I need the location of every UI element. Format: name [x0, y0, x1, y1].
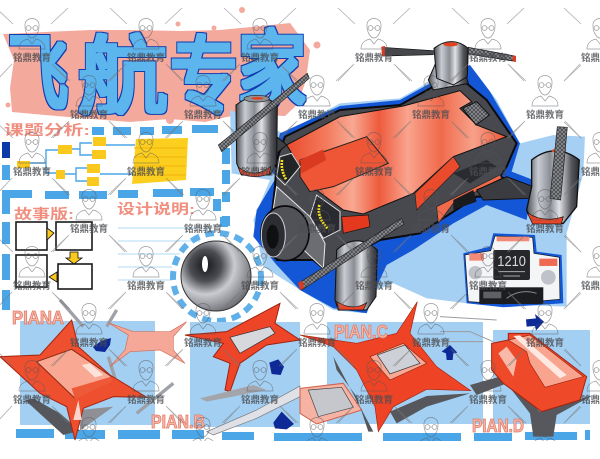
mind map: [2, 137, 188, 186]
remote controller: [463, 233, 563, 307]
watermark layer: 铭鼎教育: [469, 52, 507, 64]
title: 飞航专家: 专: [170, 30, 238, 124]
lens detail circle: [173, 233, 261, 321]
shadow: [25, 398, 80, 435]
watermark layer: 铭鼎教育: [469, 394, 507, 406]
watermark layer: 铭鼎教育: [127, 52, 165, 64]
bottom dashed border: [16, 429, 590, 441]
shadow and stand: [470, 377, 593, 437]
concept C sketch: [300, 302, 544, 432]
top highlight: [508, 335, 583, 387]
watermark layer: 铭鼎教育: [298, 223, 336, 235]
watermark layer: 铭鼎教育: [13, 166, 51, 178]
heading: design description: 设计说明:: [117, 201, 195, 217]
watermark layer: 铭鼎教育: [298, 109, 336, 121]
top panel: [370, 343, 427, 380]
remote blue outline: [463, 233, 563, 307]
watermark layer: 铭鼎教育: [526, 223, 564, 235]
box body: [492, 333, 587, 412]
watermark layer: 铭鼎教育: [526, 337, 564, 349]
side panel: [437, 175, 502, 223]
watermark layer: 铭鼎教育: [70, 109, 108, 121]
heading: storyboard: 故事版:: [14, 206, 74, 222]
red buttons: [497, 237, 529, 241]
map connectors: [30, 143, 135, 181]
screen: [493, 250, 530, 280]
light blue marker shadow: [230, 65, 585, 313]
motor front: [335, 241, 377, 310]
watermark layer: 铭鼎教育: [13, 394, 51, 406]
watermark layer: 铭鼎教育: [355, 52, 393, 64]
title: 飞航专家: 飞: [8, 27, 68, 121]
body: dark shell: [270, 83, 532, 270]
watermark layer: 铭鼎教育: [355, 394, 393, 406]
main drone rendering: [218, 42, 585, 313]
concept backgrounds: pale blue: [20, 321, 590, 427]
top panel: [230, 327, 275, 353]
lower display: [479, 287, 543, 304]
label: PIAN A: PIANA: [12, 308, 64, 328]
panel: topic analysis dashed frame: [2, 125, 230, 310]
watermark layer: 铭鼎教育: [298, 337, 336, 349]
concept A sketch: [0, 300, 173, 440]
star body: [0, 320, 147, 440]
rear arm: [477, 177, 533, 200]
watermark layer: 铭鼎教育: [355, 280, 393, 292]
label: PIAN B: PIAN.B: [151, 412, 205, 432]
label: PIAN D: PIAN.D: [472, 416, 524, 436]
body: red top shell: [287, 91, 507, 214]
design description lines: [118, 228, 215, 280]
watermark layer: 铭鼎教育: [184, 223, 222, 235]
propellers: [60, 300, 173, 413]
watermark layer: 铭鼎教育: [526, 109, 564, 121]
top panel: [37, 349, 112, 398]
title: 飞航专家: 航: [78, 30, 168, 124]
arrows: [269, 359, 284, 375]
headlight right with yellow LEDs: [310, 195, 340, 238]
watermark layer: 铭鼎教育: [241, 280, 279, 292]
arrow: concept A to flat plan: [93, 338, 111, 352]
camera lens: [261, 206, 309, 261]
title: 飞航专家: [8, 24, 306, 124]
watermark layer: 铭鼎教育: [469, 166, 507, 178]
watermark layer: 铭鼎教育: [184, 337, 222, 349]
storyboard frames: [16, 222, 92, 289]
dark blue marker shadow: [253, 65, 533, 313]
arrows: [47, 228, 54, 240]
left arm: [262, 137, 287, 153]
front red plate: [342, 215, 370, 233]
propeller front: [298, 218, 404, 290]
watermark layer: 铭鼎教育: [70, 337, 108, 349]
small top view: [300, 383, 362, 424]
bottom white margin: [0, 441, 600, 459]
watermark layer: 铭鼎教育: [355, 166, 393, 178]
flat plan sketch: [108, 322, 187, 367]
propeller top: [382, 47, 433, 56]
remote body: [465, 236, 560, 304]
yellow text block: [132, 138, 188, 184]
top arm: [428, 53, 468, 90]
heading: topic analysis: 课题分析:: [4, 122, 90, 138]
propeller right: [550, 127, 567, 200]
watermark layer: 铭鼎教育: [127, 166, 165, 178]
lower silver view: [207, 386, 300, 435]
nose plate: [272, 187, 325, 268]
label: PIAN C: PIAN.C: [334, 322, 388, 342]
watermark layer: 铭鼎教育: [469, 280, 507, 292]
watermark layer: 铭鼎教育: [70, 223, 108, 235]
watermark layer: 铭鼎教育: [13, 280, 51, 292]
dark blue marker: [2, 142, 10, 158]
body: [185, 303, 300, 392]
title splash: salmon marker wash: [3, 7, 320, 124]
watermark layer: 铭鼎教育: [13, 52, 51, 64]
shadow: [333, 357, 470, 432]
pencil side sketch: [437, 317, 497, 342]
concept D sketch: [470, 333, 593, 437]
mesh vent: [463, 102, 489, 125]
motor left: [236, 97, 277, 175]
motor top: [434, 42, 468, 85]
watermark layer: 铭鼎教育: [412, 337, 450, 349]
raised wedge: [300, 137, 388, 192]
joysticks: [469, 266, 482, 279]
yellow map nodes: [17, 137, 106, 186]
watermark layer: 铭鼎教育: [127, 280, 165, 292]
frames: [16, 222, 92, 289]
arrow: [442, 345, 457, 360]
star body: [300, 302, 471, 432]
remote controller: 1210: [497, 254, 526, 270]
watermark layer: 铭鼎教育: [241, 52, 279, 64]
propeller left: [218, 73, 309, 152]
motor right: [527, 151, 579, 223]
watermark layer: 铭鼎教育: [412, 223, 450, 235]
watermark layer: 铭鼎教育: [241, 166, 279, 178]
title: 飞航专家: 家: [238, 24, 306, 118]
watermark layer: 铭鼎教育: [127, 394, 165, 406]
concept B sketch: [185, 303, 300, 435]
watermark layer: 铭鼎教育: [184, 109, 222, 121]
watermark layer: 铭鼎教育: [241, 394, 279, 406]
watermark layer: 铭鼎教育: [412, 109, 450, 121]
headlight left with yellow LEDs: [277, 153, 300, 185]
